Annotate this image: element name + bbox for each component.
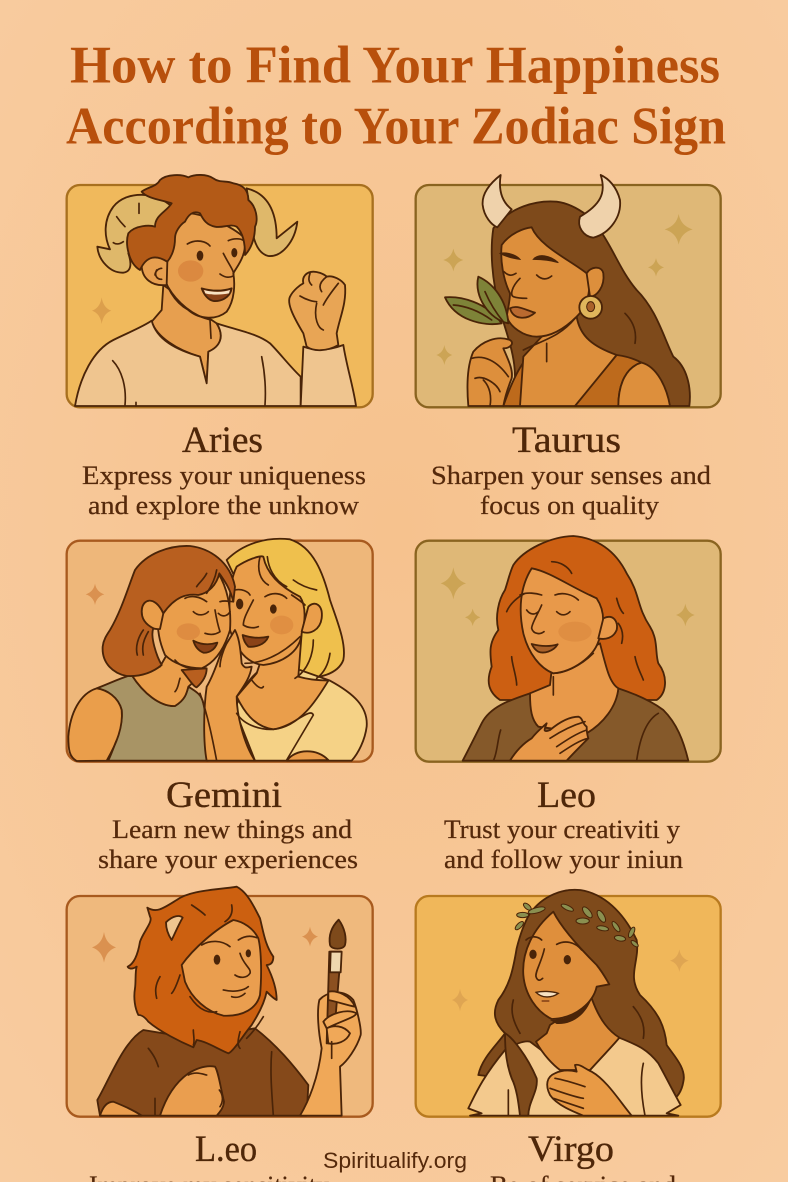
heading: Leo (second): L.eo bbox=[195, 1129, 257, 1170]
title: According to Your Zodiac Sign bbox=[66, 98, 726, 156]
text: Gemini advice bbox=[98, 814, 358, 874]
text: Gemini advice: Learn new things and bbox=[112, 814, 352, 844]
panel: Gemini illustration bbox=[67, 539, 373, 762]
heading: Gemini: Gemini bbox=[166, 775, 282, 816]
title: How to Find Your Happiness bbox=[70, 36, 720, 94]
panel: Leo illustration bbox=[416, 536, 721, 762]
text: Gemini advice: share your experiences bbox=[98, 844, 358, 874]
text: Aries advice bbox=[82, 460, 366, 520]
heading: Virgo: Virgo bbox=[528, 1129, 614, 1170]
panel: Taurus illustration bbox=[416, 175, 721, 407]
text: Aries advice: Express your uniqueness bbox=[82, 460, 366, 490]
panel: Virgo illustration bbox=[416, 890, 721, 1117]
watermark: Spiritualify.org: Spiritualify.org bbox=[323, 1148, 467, 1173]
heading: Leo: Leo bbox=[537, 775, 596, 816]
panel: Leo (second) illustration with paintbrush bbox=[67, 887, 373, 1117]
text: Taurus advice: focus on quality bbox=[480, 490, 660, 520]
heading: Aries: Aries bbox=[182, 420, 263, 461]
text: Leo advice bbox=[444, 814, 683, 874]
text: Aries advice: and explore the unknow bbox=[88, 490, 360, 520]
title bbox=[66, 36, 726, 156]
text: Taurus advice: Sharpen your senses and bbox=[431, 460, 711, 490]
heading: Taurus: Taurus bbox=[512, 420, 621, 461]
text: Taurus advice bbox=[431, 460, 711, 520]
panel: Aries illustration bbox=[67, 175, 373, 407]
text: Leo advice: and follow your iniun bbox=[444, 844, 683, 874]
text: Leo advice: Trust your creativiti y bbox=[444, 814, 681, 844]
